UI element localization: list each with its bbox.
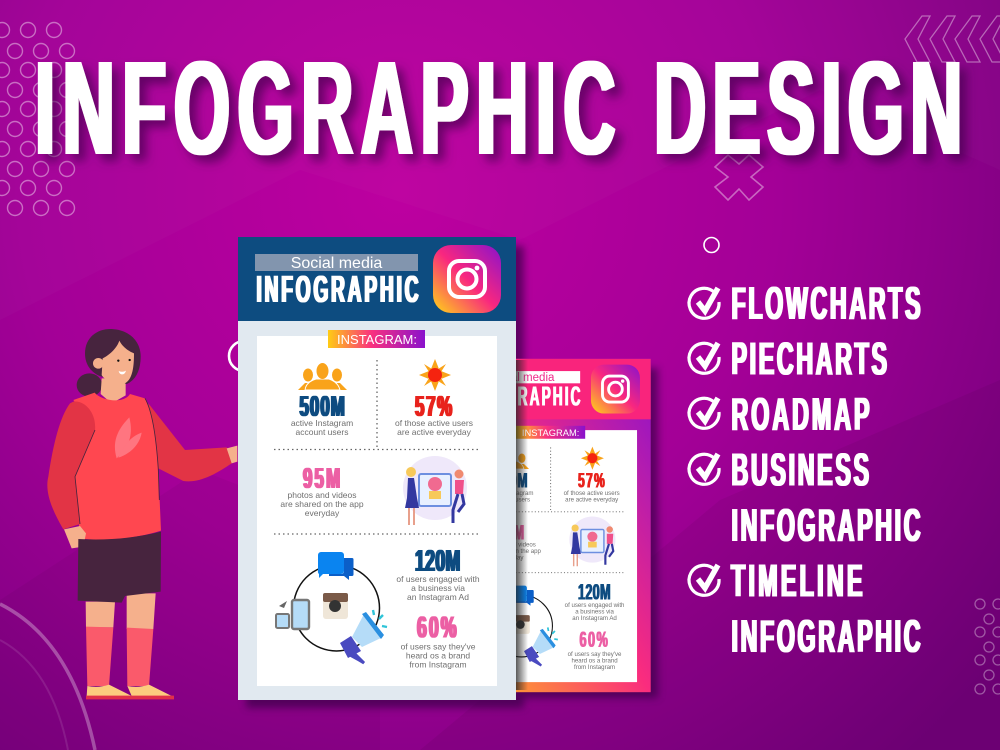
panel: back infographic card (pink): Social media [489,372,555,384]
panel: back infographic card (pink): an Instagram Ad [572,615,617,622]
item: business infographic [732,444,920,551]
stat: 120M [396,544,480,602]
panel: back infographic card (pink): heard os a brand [571,657,618,664]
icon: check [689,343,719,373]
banner: instagram [328,330,425,348]
panel: back infographic card (pink): account users [492,496,530,503]
icon: check [689,454,719,484]
stat: 57%: are active everyday [397,427,472,437]
item: timeline infographic: INFOGRAPHIC [732,610,920,662]
stat: 500M [291,392,353,437]
icon: check [689,565,719,595]
panel: back infographic card (pink): 500M [495,469,527,493]
title [35,33,962,183]
content panel [257,336,497,686]
stat: 500M: active Instagram [291,418,353,428]
panel: back infographic card (pink): active Instagram [489,490,533,497]
stat: 120M: an Instagram Ad [407,592,469,602]
icon: sun [419,359,451,391]
icon: check [689,398,719,428]
stat: 57% [395,392,473,437]
stat: 57%: 57% [415,392,452,423]
panel: back infographic card (pink): 95M [497,521,524,544]
panel: main infographic card [238,237,516,700]
icon: megaphone [340,610,387,663]
stat: 95M: 95M [303,464,340,495]
decorative dot grid: bottom right [975,599,1000,694]
illustration: woman presenting [47,329,237,699]
stat: 95M: everyday [305,508,340,518]
illustration: people with phone [403,456,467,525]
decorative arcs [0,604,95,750]
panel: back infographic card (pink): from Instagram [574,664,615,671]
icon: check [689,288,719,318]
panel: back infographic card (pink): of users engaged with [565,602,624,609]
stat: 60%: 60% [417,611,456,645]
stat: 60%: from Instagram [409,660,467,670]
banner: instagram: INSTAGRAM: [337,332,417,347]
stat: 500M: account users [296,427,348,437]
stat: 60%: heard os a brand [406,650,470,660]
panel: back infographic card (pink): everyday [499,555,524,562]
subtitle: social media: Social media [291,255,382,272]
stat: 95M: photos and videos [288,490,356,500]
stat: 120M: of users engaged with [396,574,480,584]
panel: back infographic card (pink) [516,358,651,692]
panel: back infographic card (pink): 57% [578,469,605,493]
panel: back infographic card (pink): of those active users [564,490,620,497]
stat: 57%: of those active users [395,418,473,428]
decorative ring [704,238,719,252]
stat: 120M: a business via [411,583,465,593]
card heading: INFOGRAPHIC [256,269,418,311]
stat: 95M [280,464,364,518]
icon: camera [323,593,348,619]
subtitle: social media [255,254,418,272]
item: business infographic: BUSINESS [732,444,869,496]
feature checklist [689,277,920,662]
diagram: social cycle [276,552,387,663]
panel: back infographic card (pink): are shared on the app [481,548,542,555]
card body [238,237,516,700]
panel: back infographic card (pink): 120M [578,580,611,604]
icon: chat bubbles [318,552,354,580]
icon: devices [276,600,309,629]
item: flowcharts: FLOWCHARTS [732,277,920,329]
stat: 60% [401,611,476,670]
panel: back infographic card (pink): are active everyday [565,496,619,503]
decorative dot grid: top left [0,22,74,216]
card header band [238,237,516,321]
icon: users [298,363,347,390]
panel: back infographic card (pink): of users say they've [568,651,622,658]
panel: back infographic card (pink): photos and videos [486,542,536,549]
panel: back infographic card (pink): INFOGRAPHIC [464,380,581,412]
item: roadmap: ROADMAP [732,388,870,440]
title: DESIGN [654,33,962,183]
item: timeline infographic: TIMELINE [731,555,862,607]
stat: 120M: 120M [415,544,460,578]
item: business infographic: INFOGRAPHIC [732,499,920,551]
panel: back infographic card (pink): a business via [575,609,615,616]
panel: back infographic card (pink): INSTAGRAM: [522,428,579,438]
card shadows [246,246,658,708]
decorative chevrons [905,16,1000,62]
title: INFOGRAPHIC [35,33,616,183]
decorative ring behind card [229,341,259,371]
stat: 95M: are shared on the app [280,499,364,509]
stat: 60%: of users say they've [401,642,476,652]
decorative cross outline [715,155,763,200]
item: timeline infographic [731,555,920,662]
icon: instagram logo [433,245,501,313]
stat: 500M: 500M [300,392,345,423]
item: piecharts: PIECHARTS [732,333,887,385]
panel: back infographic card (pink): 60% [579,628,608,652]
